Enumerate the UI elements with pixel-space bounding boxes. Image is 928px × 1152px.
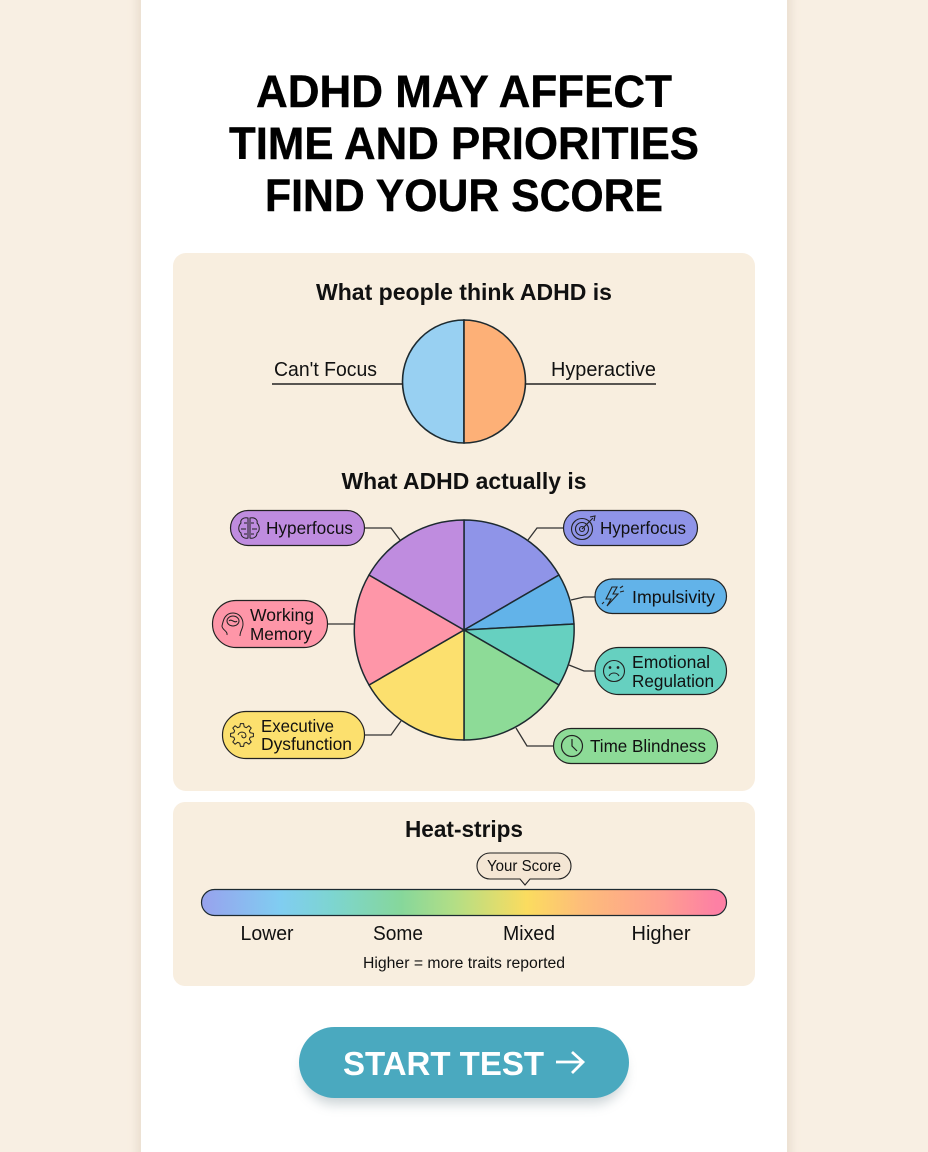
pill: working memory: Working [250, 605, 314, 625]
label: can't focus: Can't Focus [274, 359, 377, 381]
pill: emotional regulation: Regulation [632, 671, 714, 691]
pill: time blindness [554, 728, 718, 764]
pill: working memory [212, 600, 328, 648]
callout: your score [477, 853, 571, 885]
panel: ADHD perception versus reality [173, 253, 755, 791]
connector lines [328, 528, 595, 746]
pill: time blindness: Time Blindness [590, 736, 706, 756]
pill: hyperfocus right [564, 510, 698, 546]
pill: hyperfocus left [230, 510, 364, 546]
scale labels: Some [373, 923, 423, 945]
pill: impulsivity: Impulsivity [632, 587, 715, 607]
heading: what ADHD actually is: What ADHD actually is [342, 468, 586, 494]
pill: hyperfocus right: Hyperfocus [600, 518, 686, 538]
panel: heat-strips [173, 802, 755, 986]
title: TIME AND PRIORITIES [229, 118, 699, 169]
pill: executive dysfunction [222, 712, 364, 758]
scale labels: Mixed [503, 923, 555, 945]
pill: hyperfocus left: Hyperfocus [266, 518, 353, 538]
scale labels: Higher [632, 923, 691, 945]
note: scale explanation: Higher = more traits reported [363, 955, 565, 972]
pill: emotional regulation: Emotional [632, 652, 710, 672]
pill: executive dysfunction: Executive [261, 716, 334, 736]
heading: what people think: What people think ADHD is [316, 279, 612, 305]
icon: gear [231, 724, 253, 746]
scale labels [240, 923, 691, 945]
icon: lightning bolt [602, 586, 624, 606]
icon: clock [562, 736, 582, 756]
icon: arrow [556, 1052, 583, 1073]
pill: working memory: Memory [250, 624, 312, 644]
icon: sad face [604, 660, 624, 682]
label: hyperactive: Hyperactive [551, 359, 656, 381]
title [229, 66, 699, 221]
icon: brain [239, 518, 259, 538]
button: start test: START TEST [343, 1045, 544, 1082]
white page card [141, 0, 787, 1152]
pill: emotional regulation [595, 648, 726, 694]
icon: head with brain [222, 613, 243, 636]
chart: seven-part ADHD pie [354, 520, 574, 740]
chart: two-part perception circle [402, 320, 525, 443]
button: start test [299, 1027, 629, 1098]
pill: impulsivity [595, 579, 726, 614]
title: ADHD MAY AFFECT [256, 66, 672, 117]
icon: target [572, 516, 595, 540]
pill: executive dysfunction: Dysfunction [261, 734, 352, 754]
heading: heat-strips: Heat-strips [405, 816, 523, 842]
heat strip gradient bar [202, 890, 726, 916]
scale labels: Lower [240, 923, 294, 945]
title: FIND YOUR SCORE [265, 170, 663, 221]
callout: your score: Your Score [487, 858, 561, 875]
